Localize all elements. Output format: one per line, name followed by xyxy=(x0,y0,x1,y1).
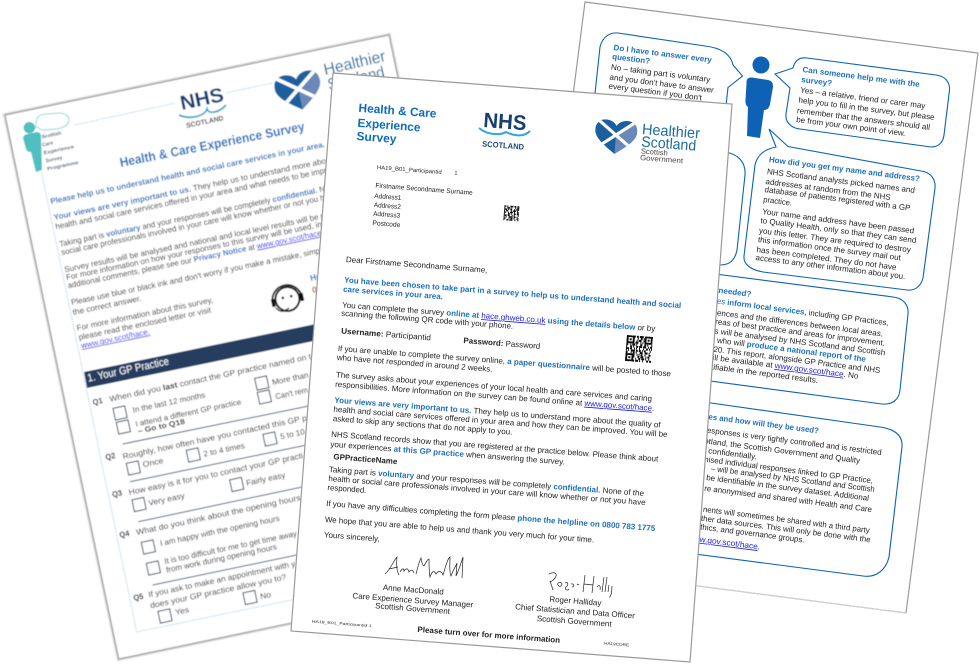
speech bubble: can someone help: Yes – a relative, friend or carer may xyxy=(800,86,926,110)
speech bubble: how will responses be used: es and how will they be used? xyxy=(708,412,819,435)
question Q5: If you ask to make an appointment with y xyxy=(148,559,296,599)
question Q3: How easy is it for you to contact your GP practi xyxy=(128,451,304,497)
section banner: your GP practice xyxy=(84,321,333,388)
question Q1: I attend a different GP practice xyxy=(135,397,242,429)
dotted frame xyxy=(42,83,330,632)
question Q2: Q2 xyxy=(105,451,117,462)
question Q2: Once xyxy=(142,456,165,469)
address block: 1 xyxy=(454,171,458,177)
question Q5 xyxy=(133,559,296,623)
QR code xyxy=(625,336,653,362)
intro text block: Taking part is voluntary and your responses will be completely confidential. N xyxy=(59,184,326,249)
speech bubble: do I have to answer xyxy=(590,33,742,160)
signature: Anne MacDonald xyxy=(385,557,463,578)
speech bubble: how did you get my name: has been completed. They do not have xyxy=(756,245,898,272)
speech bubble: do I have to answer: question? xyxy=(612,52,651,66)
letter body text: scanning the following QR code with your phone. xyxy=(341,309,514,331)
letter body text: asked to skip any sections that do not apply to you. xyxy=(333,414,513,437)
letter body text: your experiences at this GP practice when answering the survey. xyxy=(330,440,565,467)
intro text block: social care professionals involved in your care will know whether or not you h xyxy=(60,193,325,257)
address block: Address1 xyxy=(374,193,402,202)
letter body text: If you have any difficulties completing the form please phone the helpline on 0800 783 1775 xyxy=(326,499,656,533)
programme name: Survey xyxy=(45,155,63,164)
signatory: Roger Halliday: Chief Statistician and Data Officer xyxy=(515,602,636,620)
question Q1: When did you last contact the GP practice named on t xyxy=(109,352,313,404)
letter body text: You can complete the survey online at hace.ghweb.co.uk using the details below or by xyxy=(342,301,656,333)
speech bubble: do I have to answer: No – taking part is voluntary xyxy=(610,63,711,84)
speech bubble: why is it needed: es inform local services, including GP Practices, xyxy=(716,297,889,327)
speech bubble: how did you get my name: addresses at random from the NHS xyxy=(765,177,891,202)
logo text: Healthier Scotland, Scottish Government: Government xyxy=(640,153,684,165)
question dividers xyxy=(123,406,310,585)
intro text block: additional comments, please see our Privacy Notice at www.gov.scot/hace xyxy=(67,228,323,290)
speech bubble: how will responses be used: – will be analysed by NHS Scotland and Scottish xyxy=(710,464,875,494)
signatory: Anne MacDonald: Scottish Government xyxy=(375,601,451,616)
question Q1: In the last 12 months xyxy=(132,390,206,415)
panel: left questionnaire page xyxy=(2,32,400,662)
speech bubble: how did you get my name: database of patients registered with a GP xyxy=(764,185,911,213)
speech bubble: how will responses be used: be identifiable in the survey dataset. Additional xyxy=(706,473,870,503)
speech bubble: how will responses be used: nents will sometimes be shared with a third party xyxy=(702,505,870,535)
question Q4: from work during opening hours xyxy=(165,542,278,575)
letter body text xyxy=(324,255,682,544)
intro text block: Your views are very important to us. They help us to understand more abo xyxy=(53,156,327,222)
question Q1: Can't rem xyxy=(275,386,309,401)
programme name: Experience xyxy=(43,144,75,156)
programme name: Scottish xyxy=(41,130,62,140)
helpline label: He xyxy=(309,271,322,283)
letter body text: We hope that you are able to help us and thank you very much for your time. xyxy=(325,515,594,544)
speech bubble: how will responses be used: otland, the Scottish Government and Quality xyxy=(704,436,861,465)
programme name: Care xyxy=(42,140,54,148)
icon: helpline headset xyxy=(269,282,306,314)
speech bubble: how did you get my name: How did you get my name and address? xyxy=(768,155,920,183)
letter body text: You have been chosen to take part in a survey to help us to understand health and social xyxy=(344,276,682,310)
question Q1: – Go to Q18 xyxy=(137,417,186,436)
letter body text: health or social care professionals involved in your care will know whether or not you have xyxy=(328,474,646,507)
intro text block: Survey results will be analysed and national and local level results will be p xyxy=(64,211,326,274)
letter body text: Your views are very important to us. They help us to understand more about the quality of xyxy=(334,396,662,430)
signatory: Roger Halliday: Scottish Government xyxy=(537,614,613,629)
logo text: Healthier Scotland, Scottish Government: Scottish xyxy=(641,147,668,158)
speech bubble: why is it needed: who will produce a national report of the xyxy=(715,336,867,364)
intro text block: health and social care services offered in your area and what needs to be impr xyxy=(55,166,328,231)
letter body text: Password: Password xyxy=(463,336,541,351)
letter body text: NHS Scotland records show that you are registered at the practice below. Please think about xyxy=(331,430,659,464)
speech bubble: how did you get my name xyxy=(744,129,935,290)
page sheet xyxy=(513,2,978,613)
question Q2: 2 to 4 times xyxy=(203,441,245,459)
speech bubble: how did you get my name: this information once the survey mail out xyxy=(757,235,902,262)
question Q1: Q1 xyxy=(92,396,104,407)
question Q5: does your GP practice allow you to? xyxy=(149,572,288,610)
helpline label xyxy=(309,271,322,295)
letter body text: The survey asks about your experiences of your local health and care services and caring xyxy=(336,370,652,403)
speech bubble: how will responses be used: ther data sources. This will only be done with the xyxy=(700,514,872,544)
speech bubble: why is it needed: iences and the differences between local areas. xyxy=(715,308,884,338)
speech bubble: can someone help: survey? xyxy=(801,75,833,88)
speech bubble: why is it needed: ill be available at www.gov.scot/hace. No xyxy=(712,353,860,381)
speech bubble: how will responses be used xyxy=(680,400,902,576)
signature: Roger Halliday xyxy=(549,573,612,597)
letter body text: GPPracticeName xyxy=(333,452,398,466)
letter body text: responded. xyxy=(327,483,367,495)
speech bubble: how did you get my name: Your name and address have been passed xyxy=(762,207,915,235)
panel: right information page xyxy=(513,2,978,613)
speech bubble: how did you get my name: practice. xyxy=(763,195,793,208)
speech bubble: how did you get my name: to Quality Health, only so that they can send xyxy=(760,216,917,245)
speech bubble: how did you get my name: access to any other information about you. xyxy=(755,253,906,281)
speech bubble: why is it needed: tifiable in the reported results. xyxy=(710,362,819,385)
logo text: Healthier Scotland, Scottish Government: Healthier xyxy=(641,121,701,142)
address block: HA19_B01_Participantid xyxy=(377,165,442,176)
letter body text: responsibilities. More information on the survey can be found online at www.gov.scot/hace. xyxy=(335,380,655,413)
speech bubble: do I have to answer: every question if you don't xyxy=(608,82,703,103)
logo: NHS Scotland xyxy=(479,109,530,152)
speech bubble: why is it needed: reas of best practice and areas for improvement. xyxy=(715,317,886,348)
question Q2 xyxy=(105,413,308,475)
logo: NHS Scotland xyxy=(178,84,226,130)
letter body text: Username: Participantid xyxy=(341,327,431,342)
logo: NHS Scotland: SCOTLAND xyxy=(186,115,224,130)
signatory: Anne MacDonald xyxy=(352,583,474,616)
icon: person xyxy=(745,56,773,138)
question Q4: It is too difficult for me to get time away xyxy=(164,529,297,566)
speech bubble: partly hidden xyxy=(700,150,745,265)
question Q4: What do you think about the opening hours xyxy=(135,493,301,537)
question Q3: Fairly easy xyxy=(245,471,286,488)
letter body text: Yours sincerely, xyxy=(324,530,380,544)
form code: HA19CORE xyxy=(604,642,630,647)
icon: survey programme person xyxy=(23,113,69,172)
speech bubble: can someone help: Can someone help me with the xyxy=(802,65,921,89)
logo text: Healthier Scotland: Scotland xyxy=(326,64,386,94)
speech bubble: how will responses be used: w.gov.scot/hace. xyxy=(698,535,761,551)
address block: Firstname Secondname Surname xyxy=(375,183,473,197)
logo: NHS Scotland: NHS xyxy=(178,84,226,115)
address block xyxy=(372,165,473,229)
survey heading: Experience xyxy=(357,116,421,134)
signatory: Roger Halliday xyxy=(515,595,636,629)
speech bubble: why is it needed: 20. This report, alongside GP Practice and NHS xyxy=(713,345,881,375)
logo: Healthier Scotland heart xyxy=(595,119,638,154)
letter body text: If you are unable to complete the survey online, a paper questionnaire will be posted to those xyxy=(338,344,672,378)
logo text: Healthier Scotland, Scottish Government: Scotland xyxy=(641,134,697,155)
question Q2: 5 to 10 xyxy=(279,427,306,441)
letter body text: who have not responded in around 2 weeks. xyxy=(336,353,493,374)
speech bubble: how will responses be used: nised individual responses linked to GP Practice, xyxy=(704,455,874,485)
data matrix code xyxy=(503,206,519,221)
logo: NHS Scotland: NHS xyxy=(483,109,527,135)
speech bubble: why is it needed xyxy=(695,272,908,404)
intro text block: For more information on how your responses to this survey will be used, in xyxy=(65,220,323,282)
intro text block: www.gov.scot/hace. xyxy=(79,327,151,350)
question Q3 xyxy=(111,451,304,512)
intro text block: For more information about this survey, xyxy=(76,295,214,333)
letter body text: health and social care services offered in your area and how they can be improved. You will be xyxy=(333,405,668,439)
footer reference: HA19_B01_Participantid 1 xyxy=(312,620,372,628)
question Q5: No xyxy=(259,590,272,601)
survey heading: Survey xyxy=(356,129,397,146)
speech bubble: why is it needed: s will be analysed by NHS Scotland and Scottish xyxy=(714,327,886,357)
helpline label: 0 xyxy=(311,284,318,295)
speech bubble: how did you get my name: you this letter. They are required to destroy xyxy=(758,226,911,254)
question Q1 xyxy=(92,352,313,436)
letter body text: Dear Firstname Secondname Surname, xyxy=(346,255,488,275)
speech bubble: can someone help: remember that the answers should all xyxy=(796,106,931,132)
signatory: Anne MacDonald: Anne MacDonald xyxy=(383,583,444,597)
speech bubble: can someone help xyxy=(775,58,950,147)
letter body text: Taking part is voluntary and your responses will be completely confidential. None of the xyxy=(329,465,645,498)
speech bubble: can someone help: help you to fill in the survey, but please xyxy=(798,96,936,122)
question Q4: Q4 xyxy=(119,529,131,540)
survey heading xyxy=(356,101,437,146)
logo: NHS Scotland: SCOTLAND xyxy=(482,140,525,152)
title: Health & Care Experience Survey xyxy=(118,119,306,170)
intro text block: Please use blue or black ink and don't worry if you make a mistake, simp xyxy=(70,246,321,307)
programme name xyxy=(41,130,79,172)
question Q3: Q3 xyxy=(111,488,123,499)
speech bubble: how will responses be used: esponses is very tightly controlled and is restricted xyxy=(706,426,882,457)
intro text block xyxy=(50,140,328,350)
logo text: Healthier Scotland, Scottish Government xyxy=(640,121,701,165)
speech bubble: how will responses be used: re anonymised and shared with Health and Care xyxy=(704,484,873,514)
question Q1: More than xyxy=(271,370,309,387)
logo: Healthier Scotland heart xyxy=(274,70,321,110)
question Q4 xyxy=(119,493,301,575)
intro text block: the correct answer. xyxy=(72,294,142,317)
signatory: Anne MacDonald: Care Experience Survey Manager xyxy=(352,591,474,609)
page sheet xyxy=(291,73,732,662)
page shadow xyxy=(5,35,502,659)
speech bubble: how did you get my name: NHS Scotland analysts picked names and xyxy=(766,167,915,195)
speech bubble: how will responses be used: l confidentially. xyxy=(704,446,757,461)
intro text block: Please help us to understand health and social care services in your area. xyxy=(50,140,325,206)
question Q2: Roughly, how often have you contacted this GP p xyxy=(122,413,308,461)
question Q5: Q5 xyxy=(133,592,145,603)
question Q3: Very easy xyxy=(148,491,186,508)
question Q5: Yes xyxy=(174,605,190,617)
survey heading: Health & Care xyxy=(358,101,437,121)
speech bubble: can someone help: be from your own point of view. xyxy=(796,115,906,138)
page bottom edge xyxy=(513,562,906,613)
speech bubble: do I have to answer: and you don't have to answer xyxy=(609,73,715,95)
speech bubble: how will responses be used: thics, and governance groups. xyxy=(700,522,805,545)
address block: Address3 xyxy=(373,211,401,220)
speech bubble: do I have to answer: Do I have to answer every xyxy=(613,43,713,65)
programme name: Programme xyxy=(47,160,79,172)
turn over note: Please turn over for more information xyxy=(417,625,561,645)
question Q4: I am happy with the opening hours xyxy=(159,514,280,548)
page sheet xyxy=(5,35,502,659)
speech bubble: why is it needed: needed? xyxy=(718,286,752,299)
signatory: Roger Halliday: Roger Halliday xyxy=(549,595,602,608)
section banner: your GP practice: 1. Your GP Practice xyxy=(86,356,170,385)
address block: Postcode xyxy=(372,220,401,229)
logo text: Healthier Scotland xyxy=(322,48,388,94)
letter body text: care services in your area. xyxy=(343,285,443,301)
address block: Address2 xyxy=(374,202,401,211)
intro text block: please read the enclosed letter or visit xyxy=(78,305,213,342)
panel: middle letter page xyxy=(291,73,732,662)
logo text: Healthier Scotland: Healthier xyxy=(322,48,388,79)
